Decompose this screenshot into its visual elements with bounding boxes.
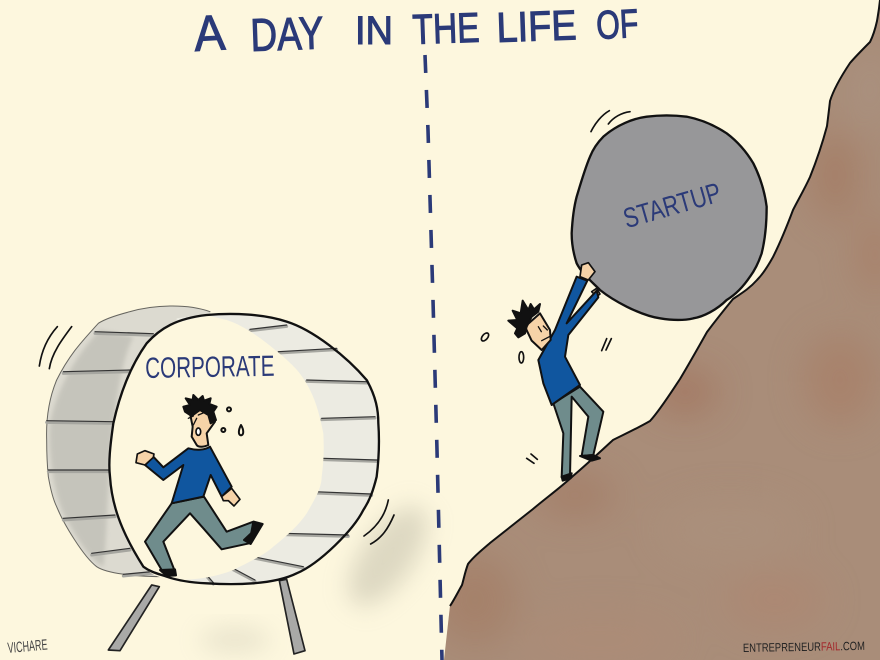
title: OF: [595, 2, 639, 48]
label: startup: STARTUP: [620, 177, 724, 234]
motion lines: [527, 111, 630, 463]
hair: [183, 395, 217, 423]
title: [193, 1, 639, 62]
title: DAY: [250, 6, 324, 61]
pants: [145, 497, 253, 572]
pants: [553, 387, 603, 477]
dashed divider line: [425, 55, 442, 660]
wheel opening: [109, 316, 324, 580]
sweat drops: [480, 332, 524, 363]
face: [188, 413, 204, 425]
hair: [508, 301, 540, 337]
wheel legs: [108, 579, 305, 654]
title: IN: [355, 9, 393, 53]
sweat drops: [221, 407, 243, 435]
mountain outline: [450, 0, 880, 606]
floor shadows: [199, 494, 443, 653]
head: [190, 407, 215, 447]
rungs: [47, 325, 377, 584]
signature: VICHARE: [7, 637, 48, 657]
head: [525, 313, 551, 350]
title: THE: [412, 4, 480, 53]
wheel outer outline: [109, 314, 379, 584]
wheel right band: [167, 314, 379, 584]
title: A: [193, 4, 227, 62]
face: [538, 326, 549, 341]
hands: [136, 451, 240, 506]
wheel back band: [47, 306, 227, 577]
shading on bands: [50, 330, 133, 567]
label: corporate: CORPORATE: [145, 350, 275, 385]
hamster wheel: [39, 306, 394, 654]
website credit: ENTREPRENEURFAIL.COM: [743, 639, 865, 655]
sweater: [145, 447, 232, 503]
shoes: [160, 522, 263, 576]
running man: [136, 395, 263, 576]
boulder and pushing man: [480, 111, 767, 481]
sweater: [538, 277, 598, 405]
mountain: [430, 0, 880, 660]
shoes: [562, 455, 600, 481]
motion lines: [39, 327, 394, 544]
boulder: [572, 115, 767, 320]
hands: [580, 263, 600, 297]
title: LIFE: [496, 1, 577, 51]
mountain colour patches: [447, 140, 880, 640]
